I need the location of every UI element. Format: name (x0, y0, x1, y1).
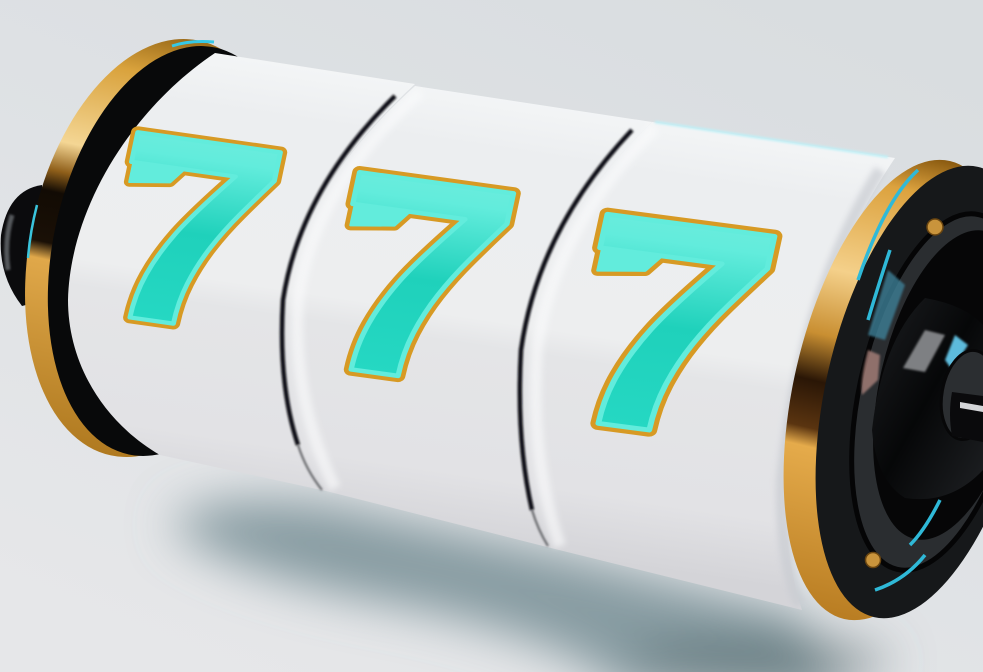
inner plate (846, 215, 983, 555)
seven 1: 7 (74, 74, 306, 392)
hub centre (935, 346, 983, 444)
segment edge highlights (297, 92, 655, 546)
axle (950, 392, 983, 442)
seven 3: 7 (534, 148, 804, 506)
screw top (927, 219, 943, 235)
cyan reflections (858, 170, 940, 590)
reel segment 3 (523, 122, 895, 610)
inner ring (821, 197, 983, 587)
black disc (777, 144, 983, 640)
seven 3: 7 (534, 148, 804, 506)
reel segment 1 (68, 53, 415, 491)
seven 1: 7 (74, 74, 306, 392)
seven 2: 7 (291, 110, 541, 448)
gold rim (744, 138, 983, 642)
left axle (1, 185, 45, 306)
gap between segments 2 and 3 (520, 130, 632, 510)
reel body (68, 53, 895, 610)
screw bottom (866, 552, 880, 568)
shade next to right rim (782, 170, 880, 605)
hub dome (872, 298, 983, 499)
floor shadow (170, 500, 890, 672)
seven 2: 7 (291, 110, 541, 448)
reel segment 2 (285, 86, 652, 548)
left gold rim (0, 15, 332, 481)
hub highlight (903, 330, 945, 372)
gap between segments 1 and 2 (282, 96, 395, 445)
right end cap (744, 138, 983, 642)
cyan rim highlight (655, 122, 888, 157)
